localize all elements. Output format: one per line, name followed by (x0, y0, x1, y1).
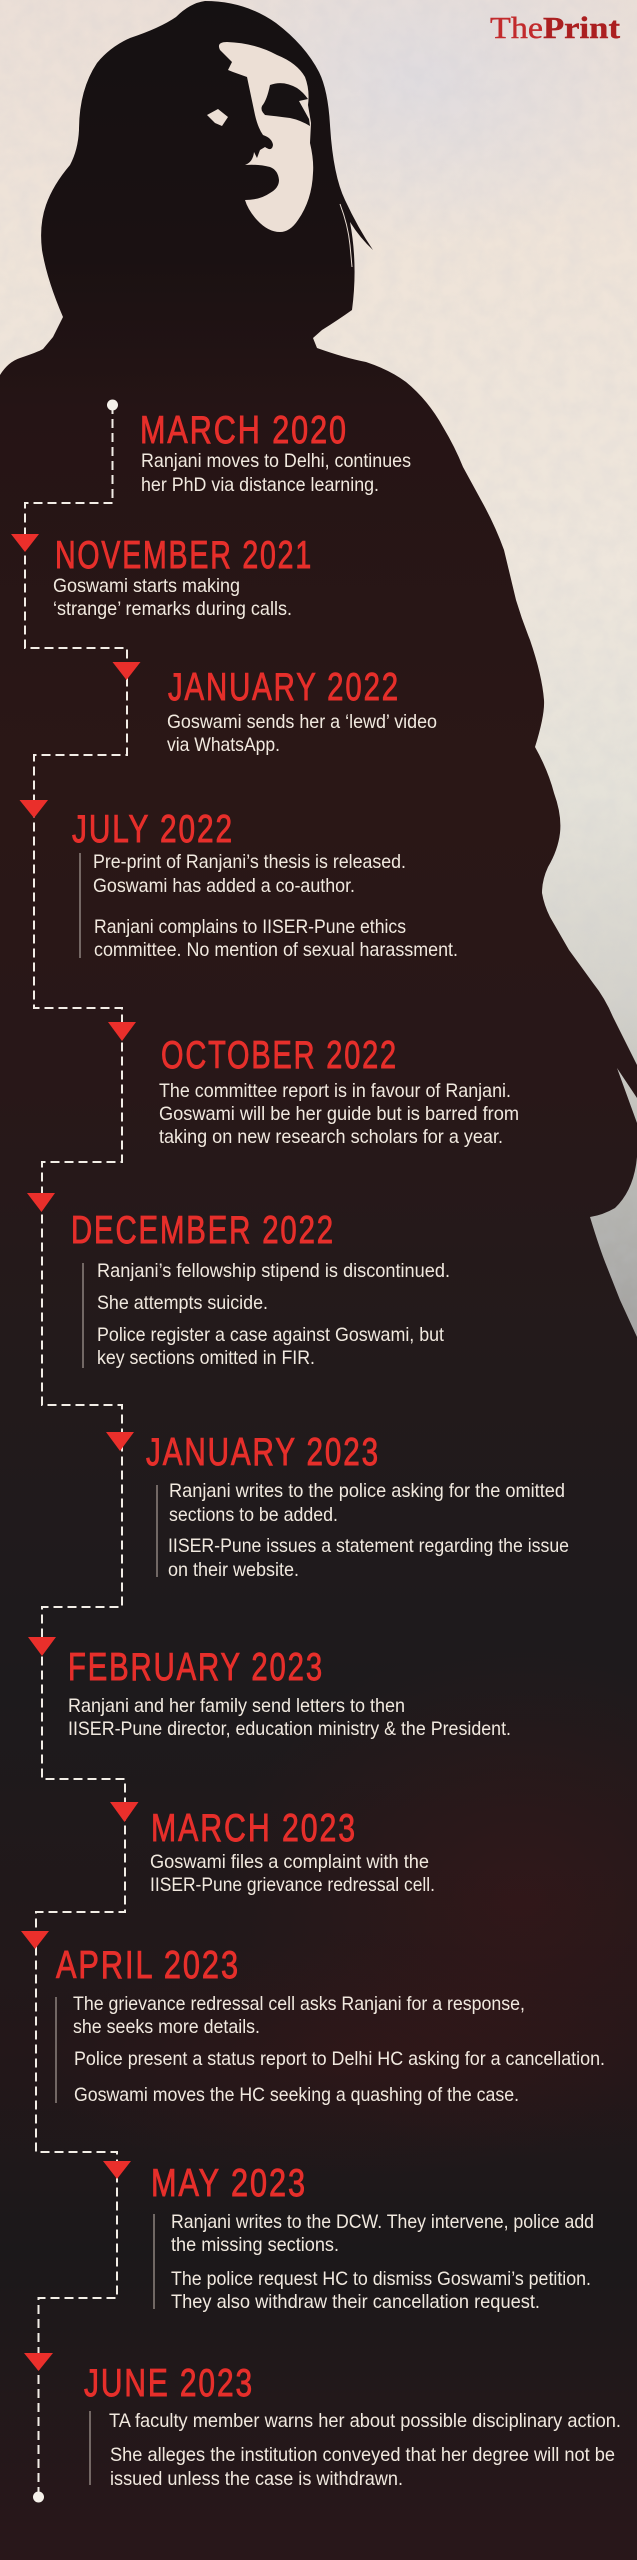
event: February 2023: FEBRUARY 2023 (68, 1646, 324, 1689)
event: February 2023: IISER-Pune director, education ministry & the President. (68, 1718, 511, 1740)
event: June 2023: issued unless the case is withdrawn. (110, 2468, 403, 2490)
event: October 2022 (108, 1022, 519, 1148)
event: November 2021 (11, 534, 313, 620)
dashed timeline connector (25, 405, 127, 2497)
event: March 2023 (110, 1802, 435, 1896)
event: November 2021: ‘strange’ remarks during calls. (53, 598, 292, 620)
logo: ThePrint: Print (543, 10, 621, 45)
event: June 2023 (24, 2353, 621, 2490)
event: October 2022: OCTOBER 2022 (161, 1034, 398, 1077)
event: January 2022 (112, 662, 437, 756)
small eye highlight (207, 109, 228, 126)
event: January 2023: Ranjani writes to the police asking for the omitted (169, 1480, 565, 1502)
event: June 2023: JUNE 2023 (84, 2362, 254, 2405)
event: May 2023: They also withdraw their cancellation request. (171, 2291, 540, 2313)
event: April 2023: APRIL 2023 (56, 1944, 240, 1987)
event: December 2022: She attempts suicide. (97, 1292, 268, 1314)
event: March 2023: IISER-Pune grievance redressal cell. (150, 1874, 435, 1896)
event: January 2022: via WhatsApp. (167, 734, 280, 756)
event: February 2023 (28, 1637, 511, 1740)
event: November 2021: Goswami starts making (53, 575, 240, 597)
event: May 2023 (103, 2161, 594, 2313)
event: December 2022: Police register a case against Goswami, but (97, 1324, 444, 1346)
event: July 2022: Goswami has added a co-author. (93, 875, 355, 897)
event: October 2022: Goswami will be her guide but is barred from (159, 1103, 519, 1125)
event: May 2023: The police request HC to dismiss Goswami’s petition. (171, 2268, 591, 2290)
eye shadow (261, 83, 310, 126)
logo: ThePrint: The (490, 10, 543, 45)
event: March 2020: her PhD via distance learning. (141, 474, 379, 496)
start dot (107, 400, 118, 410)
event: October 2022: The committee report is in favour of Ranjani. (159, 1080, 511, 1102)
event: December 2022: key sections omitted in FIR. (97, 1347, 315, 1369)
event: July 2022 (20, 800, 458, 961)
event: May 2023: the missing sections. (171, 2234, 339, 2256)
event: January 2023: on their website. (168, 1559, 299, 1581)
event: March 2023: Goswami files a complaint with the (150, 1851, 429, 1873)
event: January 2023: JANUARY 2023 (146, 1431, 380, 1474)
event: January 2023: IISER-Pune issues a statement regarding the issue (168, 1535, 569, 1557)
face highlight (219, 42, 313, 232)
end dot (33, 2492, 44, 2502)
event: December 2022: DECEMBER 2022 (71, 1209, 335, 1252)
event: October 2022: taking on new research scholars for a year. (159, 1126, 503, 1148)
event: July 2022: JULY 2022 (72, 808, 234, 851)
event: December 2022 (27, 1193, 450, 1369)
event: January 2023 (106, 1431, 569, 1581)
event: April 2023: The grievance redressal cell asks Ranjani for a response, (73, 1993, 525, 2015)
event: May 2023: MAY 2023 (151, 2162, 307, 2205)
event: March 2020: Ranjani moves to Delhi, continues (141, 450, 411, 472)
event: July 2022: Ranjani complains to IISER-Pune ethics (94, 916, 406, 938)
event: February 2023: Ranjani and her family send letters to then (68, 1695, 405, 1717)
event: April 2023 (21, 1931, 605, 2106)
event: July 2022: Pre-print of Ranjani’s thesis is released. (93, 851, 406, 873)
event: March 2020: MARCH 2020 (140, 409, 348, 452)
event: November 2021: NOVEMBER 2021 (55, 534, 313, 577)
event: April 2023: Goswami moves the HC seeking a quashing of the case. (74, 2084, 519, 2106)
event: May 2023: Ranjani writes to the DCW. They intervene, police add (171, 2211, 594, 2233)
logo: ThePrint (490, 10, 621, 45)
event: January 2022: Goswami sends her a ‘lewd’ video (167, 711, 437, 733)
event: April 2023: she seeks more details. (73, 2016, 260, 2038)
event: July 2022: committee. No mention of sexual harassment. (94, 939, 458, 961)
event: January 2023: sections to be added. (169, 1504, 338, 1526)
event: January 2022: JANUARY 2022 (168, 666, 400, 709)
hair strand highlight (340, 204, 352, 267)
event: December 2022: Ranjani’s fellowship stipend is discontinued. (97, 1260, 450, 1282)
event: March 2023: MARCH 2023 (151, 1807, 357, 1850)
dark reddish glow (40, 1640, 637, 2180)
event: March 2020 (140, 409, 411, 496)
